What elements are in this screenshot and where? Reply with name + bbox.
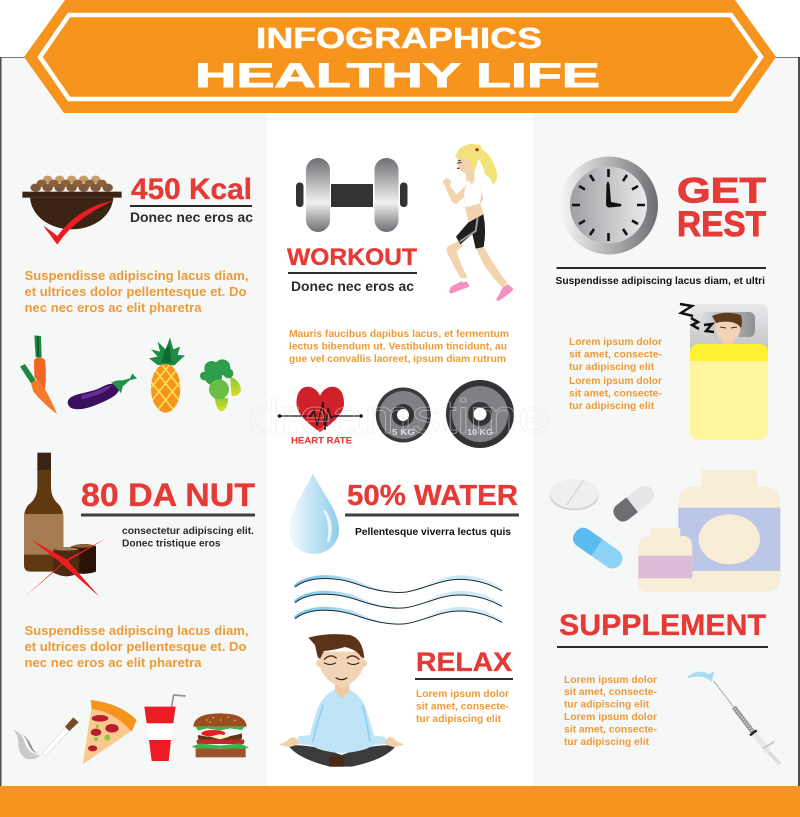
body text: Lorem ipsum dolor: [569, 336, 662, 348]
icon: syringe: [688, 672, 780, 764]
body text: [416, 688, 509, 725]
title banner: [24, 0, 776, 113]
subheading: Suspendisse adipiscing lacus diam, et ultri: [556, 275, 765, 287]
icon: cigarette with smoke: [13, 717, 79, 759]
heading: get rest: GET: [677, 172, 766, 210]
panel: calories: [20, 173, 253, 427]
heading: supplement: SUPPLEMENT: [559, 609, 766, 642]
icon: heart rate: [278, 387, 363, 446]
icon: round tablet: [550, 479, 599, 510]
icon: 5 kg weight: [376, 388, 431, 442]
body text: tur adipiscing elit: [569, 400, 654, 412]
body text: Lorem ipsum dolor: [569, 375, 662, 387]
body text: et ultrices dolor pellentesque et. Do: [24, 285, 247, 299]
body text: [569, 336, 662, 412]
subheading: Pellentesque viverra lectus quis: [355, 526, 511, 538]
heading: water: 50% WATER: [347, 480, 518, 512]
title line 1: INFOGRAPHICS: [256, 23, 542, 55]
subheading: Donec tristique eros: [122, 538, 221, 550]
subheading: [122, 526, 254, 550]
body text: sit amet, consecte-: [569, 388, 662, 400]
panel: workout: [278, 144, 514, 448]
icon: meditating man: [279, 634, 404, 767]
icon: water drop: [289, 473, 339, 554]
panel: water and relax: [279, 473, 519, 767]
icon: small bottle: [638, 528, 692, 592]
icon: sleep Z letters: [680, 304, 714, 332]
body text: Lorem ipsum dolor: [564, 711, 657, 723]
body text: [564, 674, 657, 748]
body text: et ultrices dolor pellentesque et. Do: [24, 640, 247, 654]
icon: large bottle: [678, 470, 780, 592]
icon: running woman: [443, 144, 514, 301]
heading: 450 Kcal: 450 Kcal: [131, 173, 252, 206]
heading: workout: WORKOUT: [287, 244, 417, 271]
icon: broccoli: [200, 359, 241, 411]
body text: sit amet, consecte-: [564, 724, 657, 736]
body text: nec nec eros ac elit pharetra: [24, 301, 203, 315]
icon: carrots: [20, 335, 57, 414]
title line 2: HEALTHY LIFE: [195, 57, 600, 95]
icons: pills and bottles: [550, 470, 780, 592]
body text: Suspendisse adipiscing lacus diam,: [24, 269, 248, 283]
body text: Lorem ipsum dolor: [564, 674, 657, 686]
label: heart rate: HEART RATE: [291, 436, 352, 446]
icon: bowl with check mark: [22, 176, 122, 245]
body text: sit amet, consecte-: [569, 348, 662, 360]
body text: gue vel convallis laoreet, ipsum diam rutrum: [289, 353, 506, 365]
body text: sit amet, consecte-: [564, 686, 657, 698]
heading: relax: RELAX: [416, 647, 512, 677]
icon: clock: [560, 156, 658, 254]
heading: 80 da nut: 80 DA NUT: [81, 477, 255, 513]
icon: grey capsule: [610, 482, 658, 525]
body text: Suspendisse adipiscing lacus diam,: [24, 624, 248, 638]
body text: sit amet, consecte-: [416, 700, 509, 712]
subheading: Donec nec eros ac: [291, 279, 414, 294]
body text: tur adipiscing elit: [569, 361, 654, 373]
label: 10 kg: 10 KG: [467, 427, 493, 437]
icon: 10 kg weight: [446, 380, 514, 448]
body text: lectus bibendum ut. Vestibulum tincidunt, au: [289, 340, 507, 352]
body text: nec nec eros ac elit pharetra: [24, 656, 203, 670]
icon: sleeping person in bed: [680, 304, 768, 440]
icon: soft drink cup: [144, 695, 186, 761]
panel: supplement: [550, 470, 780, 764]
body text: Lorem ipsum dolor: [416, 688, 509, 700]
body text: Mauris faucibus dapibus lacus, et fermentum: [289, 328, 509, 340]
body text: [24, 269, 248, 315]
icon: bottle and glass crossed out: [24, 453, 106, 597]
icon: dumbbell: [296, 158, 408, 232]
body text: tur adipiscing elit: [564, 736, 649, 748]
heading: get rest: REST: [677, 205, 766, 244]
label: 5 kg: 5 KG: [392, 427, 415, 437]
icon: blue capsule: [570, 524, 626, 572]
icon: eggplant: [68, 373, 137, 409]
icon: hamburger: [192, 713, 249, 757]
body text: [24, 624, 248, 670]
icon: pineapple: [149, 338, 185, 413]
heading: get rest: [677, 172, 766, 244]
watermark: dreamstime: [248, 391, 550, 444]
subheading: Donec nec eros ac: [130, 210, 253, 225]
body text: tur adipiscing elit: [564, 698, 649, 710]
panel: get rest: [556, 156, 768, 440]
icon: water waves: [294, 575, 503, 624]
body text: tur adipiscing elit: [416, 713, 501, 725]
icons: unhealthy foods: [13, 695, 249, 764]
subheading: consectetur adipiscing elit.: [122, 526, 254, 537]
icons: vegetables and fruit: [20, 335, 241, 414]
panel: 80 da nut: [13, 453, 255, 764]
body text: [289, 328, 509, 365]
icon: pizza slice: [83, 700, 137, 764]
footer bar: [0, 786, 800, 817]
